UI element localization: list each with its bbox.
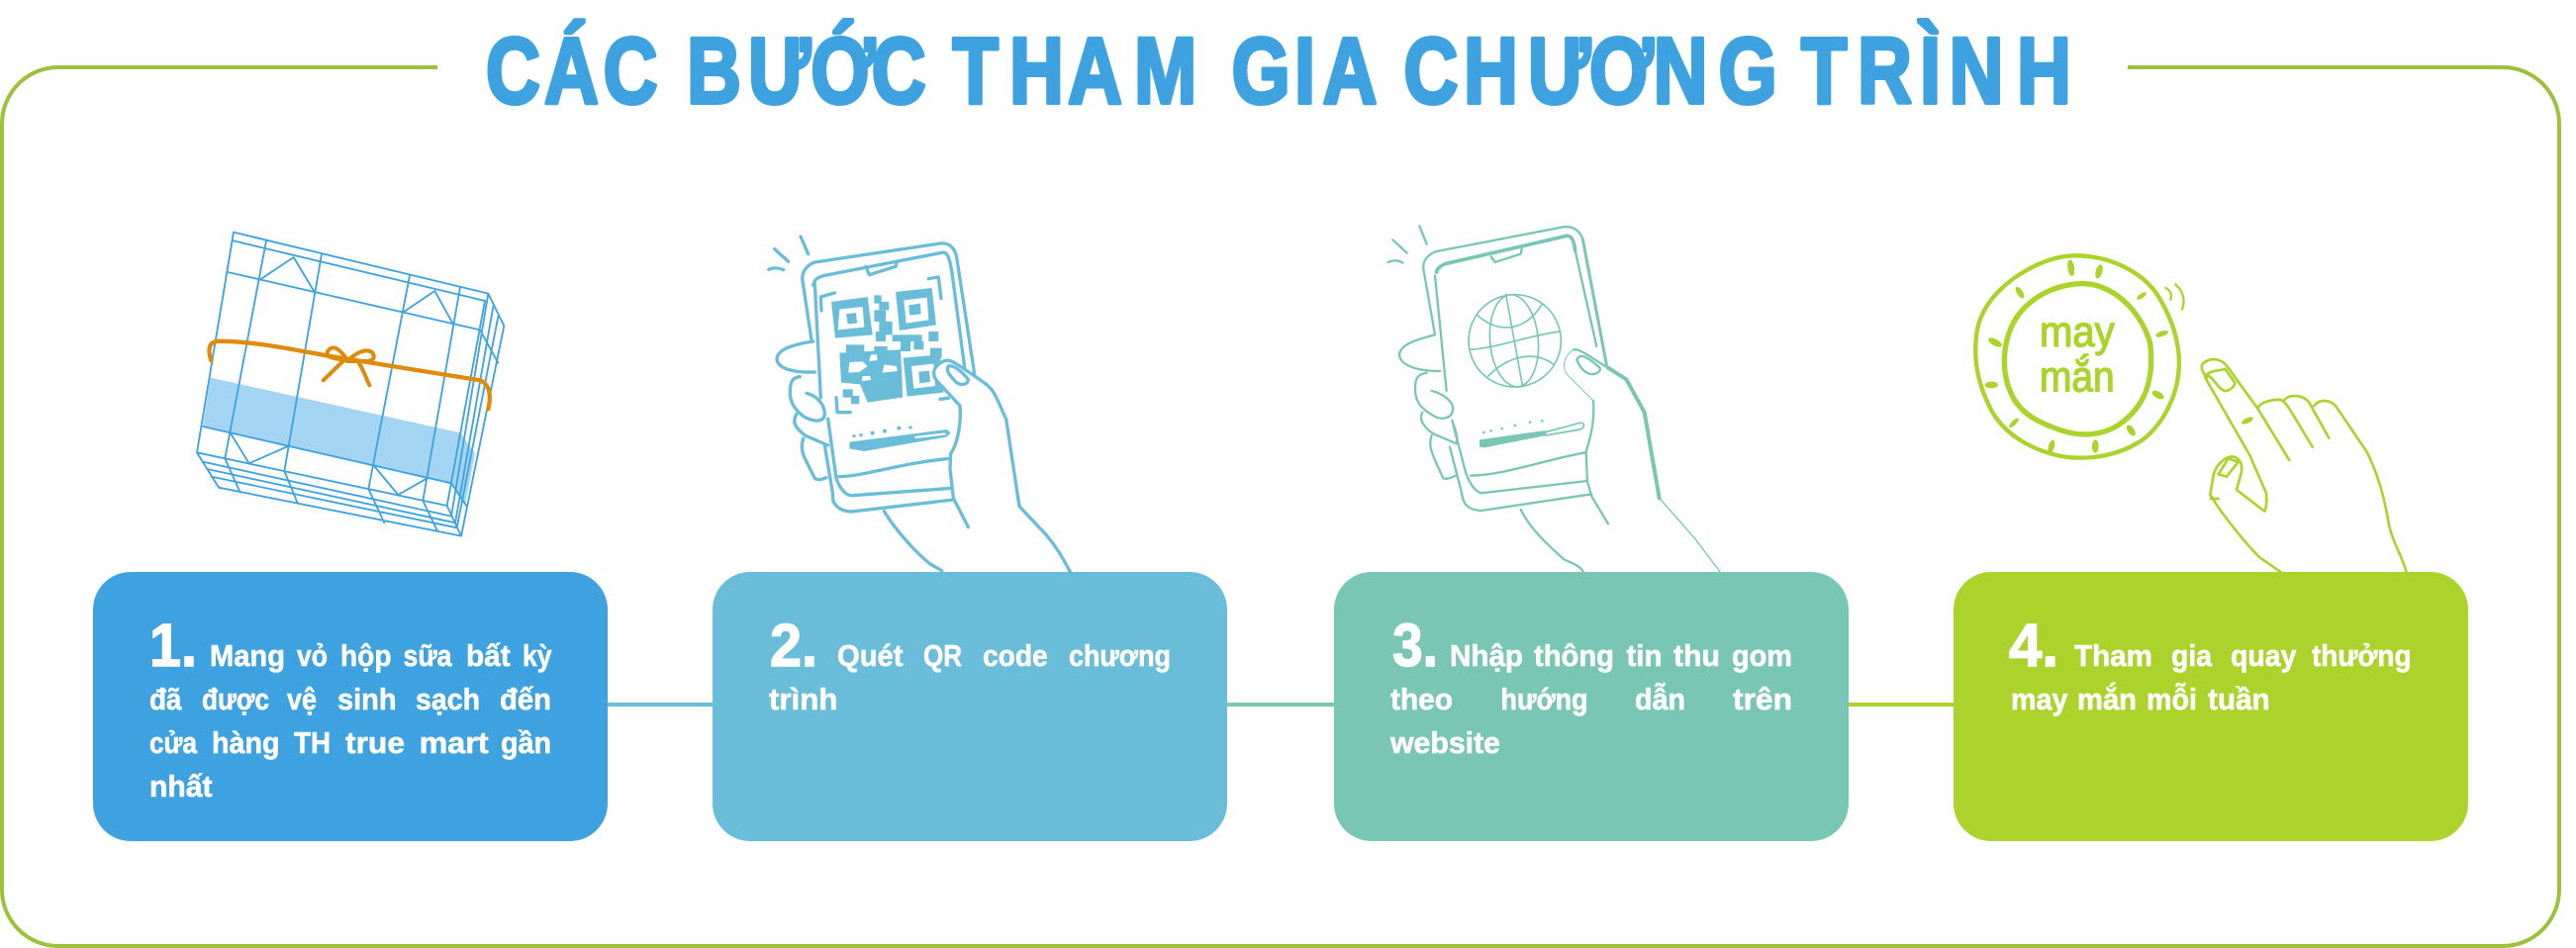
card: step 1 — [93, 572, 608, 841]
text: step 4 description: Tham — [2074, 638, 2152, 673]
text: step 2 description — [769, 638, 1171, 716]
text: step 1 description: true — [345, 725, 405, 760]
text: step 4 description: may — [2011, 682, 2068, 716]
text: step 1 description: sữa — [404, 638, 452, 673]
text: step 4 description: mắn — [2077, 681, 2137, 716]
text: step 1 description: được — [202, 682, 269, 716]
card: step 4 — [1954, 572, 2468, 841]
text: step 1 description: sinh — [337, 682, 397, 716]
text: step 3 description: dẫn — [1635, 682, 1685, 716]
number 3: 3. — [1392, 612, 1438, 679]
text: step 4 description: tuần — [2208, 682, 2270, 716]
hand and thumb over QR — [884, 360, 1071, 572]
text: step 1 description: vỏ — [297, 638, 328, 673]
panel: step 4 — [1954, 255, 2468, 841]
text: step 3 description: hướng — [1500, 682, 1587, 716]
text: step 1 description: bất — [466, 638, 511, 673]
text: step 1 description: hộp — [340, 638, 392, 673]
icon: milk carton with ribbon — [197, 233, 504, 536]
text: step 1 description: cửa — [149, 725, 198, 760]
icon: hand holding phone with globe — [1388, 226, 1720, 572]
text: step 3 description: thông — [1534, 638, 1614, 673]
text: step 4 description: gia — [2171, 638, 2213, 673]
text: step 3 description: Nhập — [1450, 638, 1523, 673]
title: CHƯƠNG — [1403, 19, 1777, 124]
text: step 1 description: nhất — [149, 769, 212, 804]
number 1: 1. — [149, 612, 197, 679]
text: step 2 description: QR — [923, 638, 962, 673]
text: step 2 description: chương — [1069, 638, 1171, 673]
connector: step 3 to 4 — [1845, 703, 1957, 707]
text: step 3 description: gom — [1732, 638, 1792, 673]
text: step 4 description — [2011, 638, 2411, 716]
text: step 2 description: trình — [769, 682, 837, 716]
text: step 1 description: Mang — [210, 638, 285, 673]
connector: step 1 to 2 — [604, 703, 716, 707]
text: step 1 description: gần — [501, 725, 551, 760]
text: step 2 description: code — [983, 638, 1048, 673]
title — [486, 19, 2071, 124]
panel: step 2 — [713, 237, 1227, 841]
panel: step 1 — [93, 233, 608, 841]
title: TRÌNH — [1801, 19, 2071, 124]
text: step 1 description: kỳ — [523, 638, 552, 673]
text: step 3 description: theo — [1390, 682, 1453, 716]
text: step 1 description: vệ — [287, 682, 317, 716]
number 2: 2. — [770, 612, 817, 679]
text: step 3 description: website — [1389, 725, 1500, 760]
QR code — [831, 288, 951, 451]
text: step 3 description: thu — [1673, 638, 1720, 673]
icon: lucky spin wheel and hand — [1975, 255, 2407, 572]
title: GIA — [1232, 19, 1377, 124]
text: step 1 description: đã — [149, 682, 182, 716]
text: step 1 description: hàng — [212, 725, 279, 760]
text: step 4 description: thưởng — [2312, 638, 2411, 673]
text: step 1 description — [149, 638, 552, 804]
text: step 1 description: mart — [420, 725, 489, 760]
title: CÁC — [486, 19, 657, 124]
card: step 2 — [713, 572, 1227, 841]
spin wheel: mắn — [2040, 354, 2115, 402]
text: step 1 description: TH — [294, 725, 331, 760]
title: THAM — [952, 19, 1196, 124]
text: step 3 description: tin — [1627, 638, 1663, 673]
connector: step 2 to 3 — [1223, 703, 1338, 707]
text: step 4 description: quay — [2231, 638, 2297, 673]
text: step 2 description: Quét — [837, 638, 903, 673]
text: step 4 description: mỗi — [2147, 682, 2197, 716]
text: step 3 description: trên — [1733, 682, 1792, 716]
card: step 3 — [1334, 572, 1849, 841]
text: step 1 description: đến — [500, 682, 551, 716]
spin wheel: may — [2040, 309, 2115, 356]
globe — [1469, 293, 1561, 389]
icon: hand holding phone with QR code — [769, 237, 1071, 572]
pointing hand — [2202, 359, 2407, 572]
spin wheel — [1975, 255, 2254, 458]
panel: step 3 — [1334, 226, 1849, 841]
text: step 1 description: sạch — [416, 682, 480, 716]
text: step 3 description — [1389, 638, 1792, 760]
title: BƯỚC — [687, 19, 926, 124]
number 4: 4. — [2009, 612, 2058, 679]
